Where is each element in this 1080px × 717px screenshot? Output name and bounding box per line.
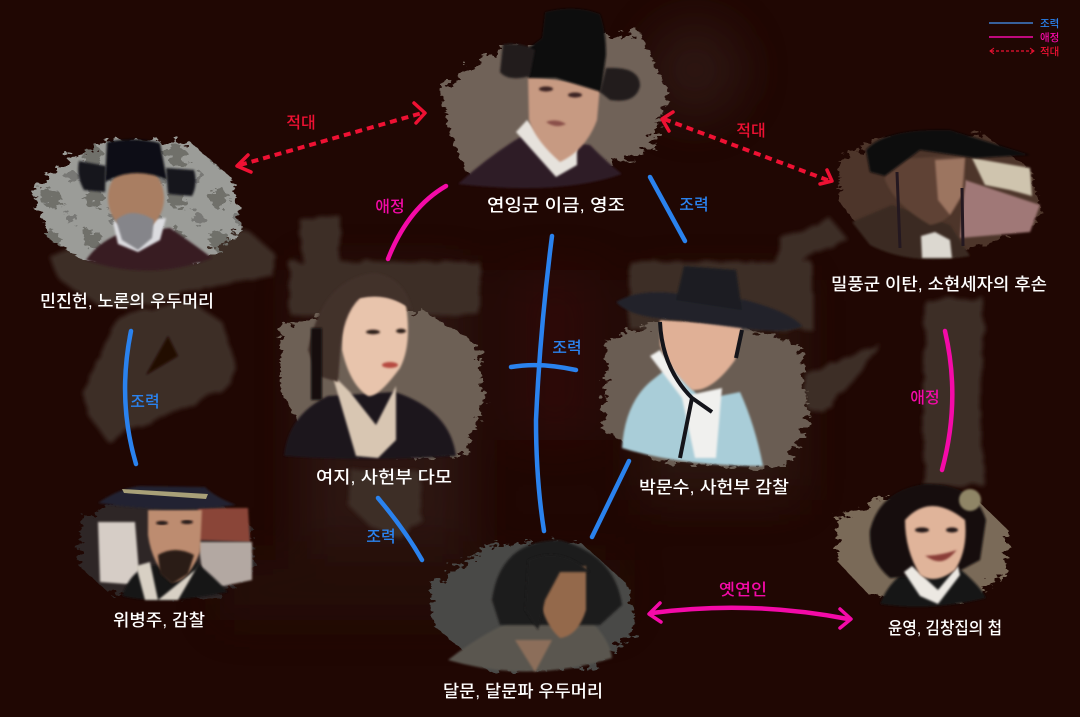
label: 윤영, 김창집의 첩: [888, 619, 1002, 638]
blue robe: [622, 362, 763, 466]
white wall: [98, 522, 140, 585]
hat string and ribbon: [660, 322, 742, 458]
eyes: [156, 520, 193, 525]
label: 달문, 달문파 우두머리: [443, 682, 603, 701]
relation label: affection: 애정: [910, 389, 940, 407]
relation label: help: 조력: [552, 339, 582, 357]
portrait: Dal-mun: [432, 540, 636, 672]
face: [885, 155, 965, 225]
line: help Dal-mun to Park Mun-su: [592, 461, 629, 537]
collar: [904, 566, 960, 604]
portrait: Yun-yeong: [836, 484, 1008, 607]
portrait: Min Jin-heon: [32, 139, 242, 271]
label: 여지, 사헌부 다모: [316, 468, 452, 487]
legend: rivals: 적대: [1040, 46, 1059, 58]
relation label: help: 조력: [366, 528, 396, 546]
gold band: [122, 489, 208, 499]
background watermark calligraphy: [48, 20, 984, 620]
black hat: [526, 8, 606, 92]
grey clothes: [448, 620, 612, 672]
face: [660, 320, 742, 390]
cream cloth: [972, 158, 1032, 196]
robe: [86, 228, 212, 271]
hat: [98, 486, 236, 509]
eyes and mouth: [539, 86, 582, 126]
line: help Dal-mun to Yeoji: [378, 498, 422, 560]
face: [148, 510, 202, 582]
beard: [158, 550, 194, 584]
face: [905, 506, 966, 579]
collar: [516, 120, 577, 177]
paper patch: [602, 322, 810, 468]
photo patch: [838, 135, 1042, 254]
label: 위병주, 감찰: [113, 611, 205, 630]
white collar: [113, 218, 166, 252]
black jacket: [284, 392, 456, 459]
relation label: rivals: 적대: [286, 114, 316, 132]
portrait: Yeoning-gun Lee Geum, Yeongjo: [440, 8, 668, 188]
chest: [515, 640, 552, 672]
label: 민진헌, 노론의 우두머리: [40, 292, 214, 311]
bead strings: [897, 172, 963, 248]
line: help Park Mun-su to Yeoning-gun: [650, 177, 685, 241]
hat: [866, 130, 1030, 176]
relation label: help: 조력: [130, 393, 160, 411]
photo patch: [78, 498, 254, 596]
portrait: Yeoji: [280, 273, 484, 459]
relation label: affection: 애정: [375, 198, 405, 216]
robe: [852, 205, 970, 259]
face: [342, 295, 408, 396]
robe: [880, 565, 986, 607]
hair: [870, 484, 986, 578]
beard: [116, 213, 154, 250]
legend: [989, 17, 1059, 58]
face: [528, 76, 600, 162]
hair ornament: [959, 489, 981, 511]
robe: [122, 562, 228, 600]
lattice photo patch: [32, 140, 242, 262]
paper texture patch: [440, 32, 668, 178]
relation label: former lovers: 옛연인: [719, 581, 767, 599]
label: 밀풍군 이탄, 소현세자의 후손: [831, 275, 1047, 294]
robe: [458, 136, 622, 188]
line: affection Yeoji to Yeoning-gun: [388, 186, 446, 259]
legend: help: 조력: [1040, 17, 1059, 30]
portrait: Wi Byeong-ju: [78, 486, 254, 600]
portrait: Milpung-gun Lee Tan: [838, 130, 1042, 259]
collar: [136, 562, 200, 600]
paper patch: [280, 312, 484, 455]
white collar: [650, 350, 722, 458]
arrow: former lovers Dal-mun and Yun-yeong: [649, 603, 851, 628]
line: help Min Jin-heon to Wi Byeong-ju: [125, 331, 136, 464]
front hair: [525, 555, 590, 630]
label: 연잉군 이금, 영조: [487, 196, 625, 215]
arrow: rivalry Min Jin-heon to Yeoning-gun: [237, 103, 425, 172]
hat brim and crown: [616, 266, 802, 331]
hair: [308, 273, 412, 382]
label: 박문수, 사헌부 감찰: [639, 478, 789, 497]
face: [108, 165, 164, 231]
photo patch: [432, 542, 636, 672]
hair back: [492, 540, 622, 625]
relation label: rivals: 적대: [736, 122, 766, 140]
relation label: help: 조력: [679, 196, 709, 214]
eyes and smile: [915, 528, 958, 560]
eyes and mouth: [366, 329, 406, 368]
collar: [332, 374, 396, 458]
white collar: [921, 232, 952, 258]
portrait: Park Mun-su: [602, 266, 810, 468]
arrow: rivalry Yeoning-gun to Milpung-gun: [662, 112, 832, 184]
face: [540, 566, 586, 638]
hat: [105, 139, 167, 182]
line: cross stroke: [511, 365, 576, 370]
line: affection Milpung-gun to Yun-yeong: [942, 331, 952, 470]
pink wall: [960, 180, 1040, 238]
photo patch: [836, 498, 1008, 600]
red wall and grey wall: [198, 508, 250, 542]
line: help Dal-mun to Yeoning-gun, center: [536, 236, 552, 531]
legend: affection: 애정: [1040, 32, 1059, 44]
